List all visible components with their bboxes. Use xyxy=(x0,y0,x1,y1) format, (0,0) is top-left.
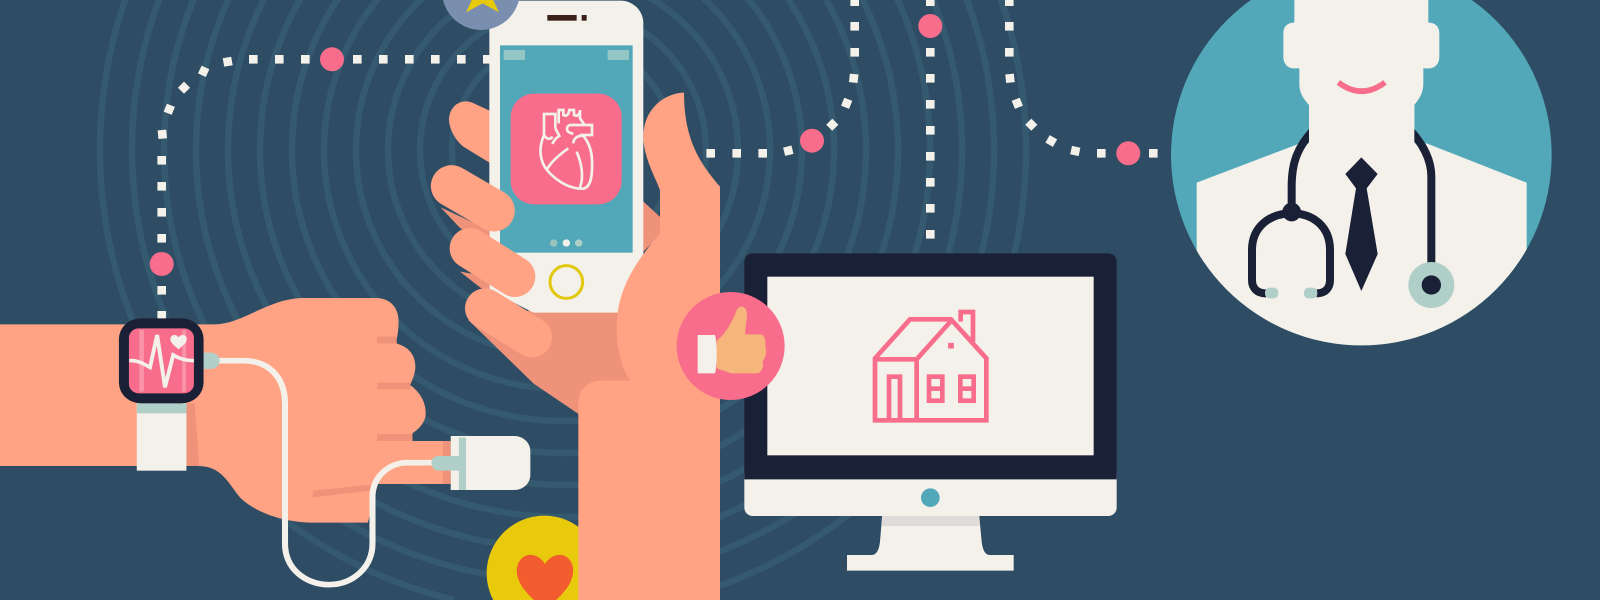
finger shadow upper xyxy=(441,207,489,245)
badge circle xyxy=(442,0,520,30)
screen stripes xyxy=(139,330,186,392)
dotted path: doctor xyxy=(1005,0,1158,165)
house icon xyxy=(875,312,986,420)
node: watch path horizontal xyxy=(320,47,344,71)
node: doctor path xyxy=(1116,141,1140,165)
monitor chin xyxy=(744,473,1117,516)
watch heart xyxy=(170,335,187,349)
chest piece centre xyxy=(1422,275,1441,295)
watch case xyxy=(119,318,204,403)
stand shadow xyxy=(881,515,980,526)
heart line icon xyxy=(540,110,592,189)
hand holding phone xyxy=(441,1,720,600)
star xyxy=(466,0,499,12)
status bar right xyxy=(608,50,629,60)
finger two xyxy=(452,186,494,211)
palm shadow behind phone xyxy=(642,200,662,253)
doctor figure xyxy=(1197,0,1527,367)
finger behind phone xyxy=(449,101,492,164)
finger four xyxy=(485,308,532,337)
camera dot xyxy=(921,488,940,507)
phone screen xyxy=(500,45,633,253)
monitor frame xyxy=(744,253,1117,479)
watch connector xyxy=(200,353,220,369)
clip connector xyxy=(431,456,461,471)
pulse line xyxy=(129,335,194,387)
cuff xyxy=(698,335,717,373)
phone xyxy=(489,1,643,313)
speaker xyxy=(547,15,577,21)
heart badge xyxy=(487,516,602,600)
watch strap xyxy=(137,402,186,471)
badge circle xyxy=(487,516,602,600)
smile xyxy=(1338,82,1385,91)
clip band xyxy=(459,438,466,490)
tie xyxy=(1345,157,1378,291)
finger clip xyxy=(451,436,530,490)
ear tip left xyxy=(1265,288,1278,298)
palm shadow xyxy=(468,310,640,433)
doctor avatar xyxy=(1171,0,1552,367)
stethoscope xyxy=(1252,127,1454,308)
orange heart xyxy=(517,555,573,600)
dotted path: phone to cloud xyxy=(706,0,859,158)
sensor cable xyxy=(219,361,434,585)
arm with smartwatch and finger sensor xyxy=(0,298,530,585)
watch screen xyxy=(129,328,194,393)
dotted path: watch to phone xyxy=(150,47,492,320)
monitor xyxy=(744,253,1117,571)
node: watch path vertical xyxy=(150,252,174,276)
knuckle lines xyxy=(186,337,451,497)
finger shadow lower xyxy=(460,272,489,292)
thumb hand xyxy=(717,307,766,373)
thumb and wrist xyxy=(578,93,720,600)
forearm and fist xyxy=(0,298,451,523)
status bar left xyxy=(504,50,525,60)
badge circle xyxy=(677,292,785,400)
camera xyxy=(582,15,587,21)
chest piece xyxy=(1408,262,1454,308)
ear tip right xyxy=(1304,288,1317,298)
star badge xyxy=(442,0,520,30)
neck overlay xyxy=(1309,100,1414,157)
node: phone path xyxy=(800,129,824,153)
home button xyxy=(550,266,583,298)
pager dots xyxy=(550,239,582,247)
app icon xyxy=(511,94,622,204)
monitor stand xyxy=(847,513,1014,571)
dotted path: monitor xyxy=(918,0,942,239)
strap clasp xyxy=(137,403,186,413)
phone body xyxy=(489,1,643,313)
node: monitor path xyxy=(918,14,942,38)
thumbs up badge xyxy=(677,292,785,400)
monitor screen xyxy=(767,277,1094,455)
finger three xyxy=(470,248,515,277)
avatar circle xyxy=(1171,0,1552,345)
